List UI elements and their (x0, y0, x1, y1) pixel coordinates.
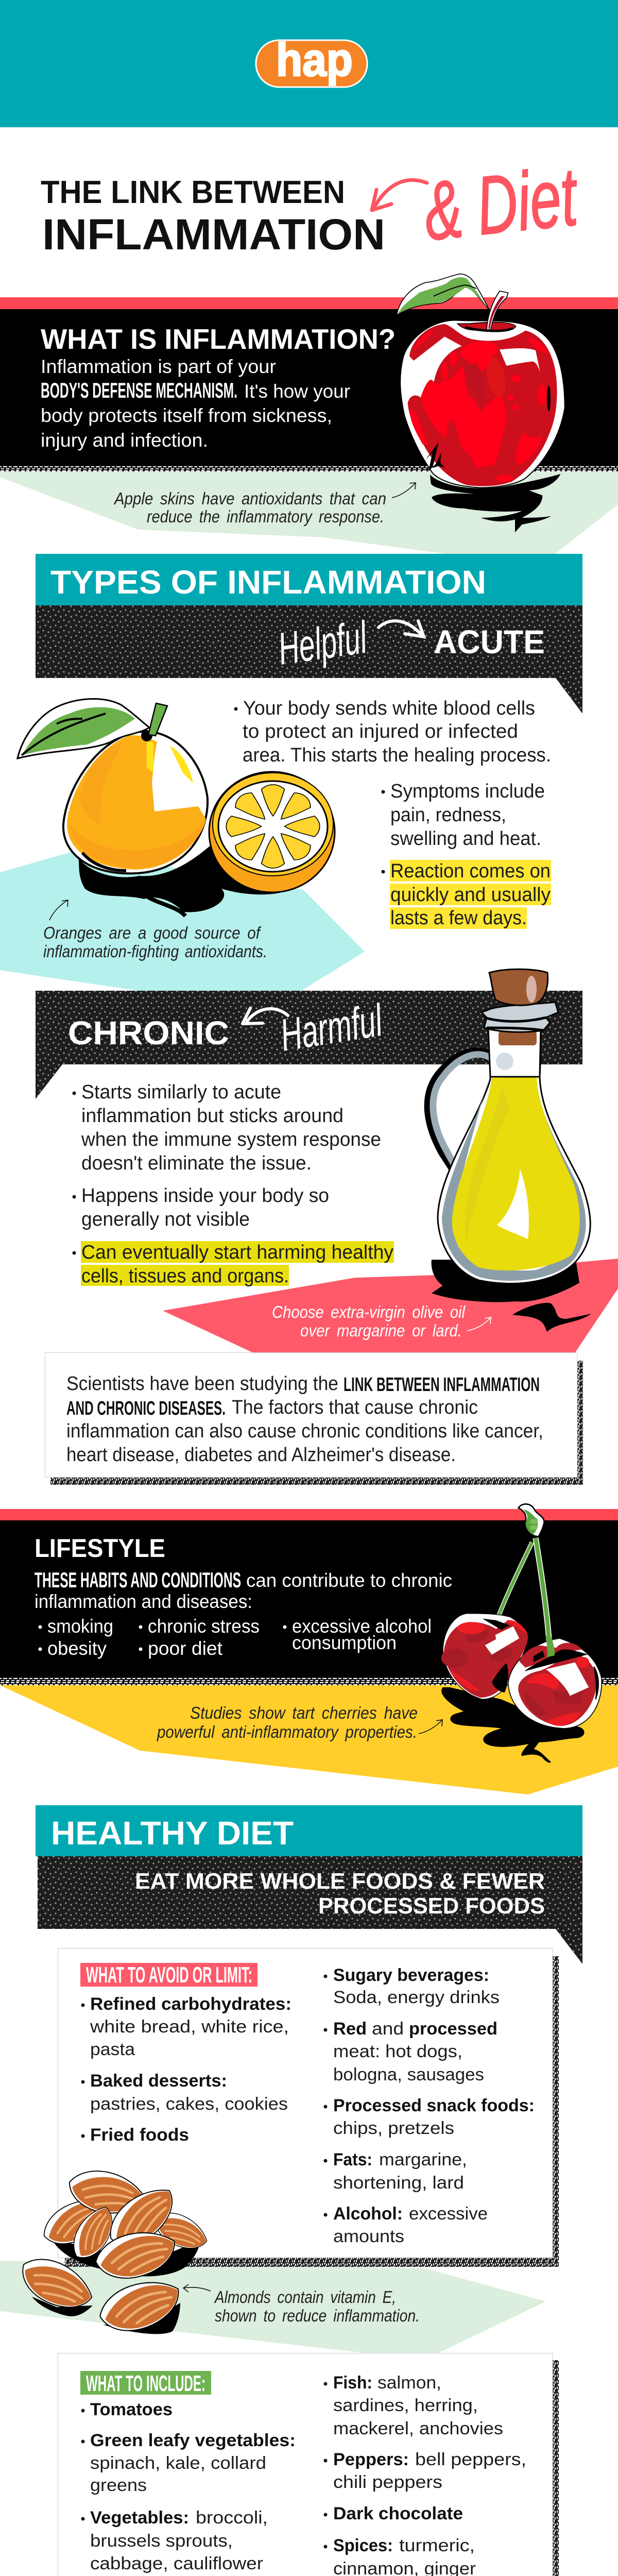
highlighted bullet: Can eventually start harming healthy (81, 1242, 393, 1263)
panel: what to include (58, 2353, 559, 2576)
habit list: smoking (47, 1616, 113, 1637)
callout: apple skins: Apple skins have antioxidants that can (113, 489, 386, 508)
include list: right column: sardines, herring, (333, 2396, 478, 2415)
panel: scientists note: Scientists have been studying the (66, 1373, 338, 1395)
caption background: green (0, 2261, 546, 2353)
intro text: inflammation and diseases: (35, 1591, 252, 1612)
avoid list: right column: Alcohol: (333, 2204, 403, 2224)
icon: cherries (441, 1504, 602, 1762)
arrow (419, 1720, 442, 1734)
callout: apple skins: reduce the inflammatory response. (147, 507, 384, 526)
heading: LIFESTYLE (35, 1534, 165, 1563)
avoid list: right column: chips, pretzels (333, 2119, 454, 2138)
callout: oranges: inflammation-fighting antioxidants. (43, 942, 267, 961)
acute bullets: Your body sends white blood cells (243, 698, 535, 719)
callout: olive oil: Choose extra-virgin olive oil (272, 1302, 466, 1321)
highlighted bullet (72, 1241, 394, 1287)
chronic bullets: when the immune system response (81, 1129, 381, 1150)
avoid list: left column (81, 1994, 291, 2145)
avoid list: right column: bologna, sausages (333, 2065, 484, 2084)
callout: cherries (157, 1703, 442, 1741)
callout: olive oil (272, 1302, 491, 1340)
banner: chronic: Harmful (277, 994, 386, 1061)
chronic bullets: doesn't eliminate the issue. (81, 1153, 312, 1174)
habit list: consumption (292, 1632, 397, 1653)
include list: right column: Spices: (333, 2536, 393, 2555)
include list: left column: spinach, kale, collard (90, 2453, 266, 2473)
avoid list: right column (323, 1965, 535, 2246)
arrow: diet to inflammation (372, 180, 427, 210)
avoid list: right column: processed (409, 2019, 497, 2039)
acute bullets: area. This starts the healing process. (243, 744, 551, 766)
avoid list: right column: Sugary beverages: (333, 1965, 489, 1985)
include list: right column: mackerel, anchovies (333, 2419, 503, 2438)
chronic bullets: inflammation but sticks around (81, 1105, 344, 1127)
avoid list: left column: pasta (90, 2040, 135, 2059)
arrow (392, 483, 416, 498)
acute bullets: pain, redness, (390, 804, 506, 826)
avoid list: right column: meat: hot dogs, (333, 2042, 462, 2061)
chronic bullets: Happens inside your body so (81, 1185, 329, 1207)
panel: scientists note: inflammation can also cause chronic conditions like cancer, (66, 1420, 543, 1442)
title: INFLAMMATION (42, 210, 385, 259)
include list: left column: cabbage, cauliflower (90, 2554, 263, 2573)
include list: left column: broccoli, (196, 2508, 268, 2528)
avoid list: left column: pastries, cakes, cookies (90, 2094, 288, 2114)
definition text: body protects itself from sickness, (41, 405, 332, 426)
caption background: aqua (0, 851, 365, 991)
acute bullets: swelling and heat. (390, 828, 541, 850)
avoid list: right column: Processed snack foods: (333, 2096, 535, 2115)
callout: almonds (183, 2284, 420, 2325)
avoid list: right column: Red (333, 2019, 367, 2039)
panel: types of inflammation (0, 554, 618, 1485)
label: avoid: WHAT TO AVOID OR LIMIT: (86, 1962, 252, 1988)
section heading (36, 1805, 582, 1856)
acute bullets (234, 698, 551, 929)
include list: right column: Fish: (333, 2373, 372, 2393)
icon: apple (397, 274, 565, 532)
include list: left column: greens (90, 2476, 147, 2495)
label: include: WHAT TO INCLUDE: (86, 2371, 205, 2396)
habit list: obesity (47, 1638, 107, 1659)
arrow (243, 1008, 288, 1024)
include list: right column: Peppers: (333, 2450, 409, 2469)
include list: left column: Tomatoes (90, 2400, 173, 2419)
banner: chronic (36, 991, 582, 1099)
banner: eat more whole foods: EAT MORE WHOLE FOODS & FEWER (135, 1869, 545, 1894)
arrow (467, 1317, 491, 1331)
title: THE LINK BETWEEN (41, 175, 345, 210)
chronic bullets: generally not visible (81, 1209, 250, 1230)
callout: cherries: powerful anti-inflammatory properties. (157, 1722, 417, 1741)
caption background: coral (163, 1259, 618, 1352)
section heading (36, 554, 582, 605)
avoid list: right column: Soda, energy drinks (333, 1988, 500, 2007)
avoid list: right column: Fats: (333, 2150, 372, 2170)
highlighted bullet: cells, tissues and organs. (81, 1265, 289, 1287)
banner: eat more whole foods: PROCESSED FOODS (318, 1893, 545, 1919)
habit list: excessive alcohol (292, 1616, 432, 1637)
include list: right column: bell peppers, (415, 2450, 526, 2469)
callout: almonds: Almonds contain vitamin E, (214, 2287, 396, 2307)
section heading: HEALTHY DIET (51, 1815, 294, 1852)
banner: acute: Helpful (275, 612, 370, 674)
panel: scientists note: heart disease, diabetes and Alzheimer's disease. (66, 1444, 456, 1466)
banner: acute (36, 605, 582, 714)
avoid list: left column: white bread, white rice, (90, 2017, 289, 2037)
highlighted bullet: quickly and usually (390, 884, 551, 906)
panel: scientists note (45, 1353, 583, 1485)
callout: olive oil: over margarine or lard. (300, 1321, 462, 1340)
panel: scientists note: AND CHRONIC DISEASES. (66, 1398, 226, 1419)
intro text (35, 1568, 452, 1612)
include list: left column (81, 2400, 300, 2576)
banner: acute: ACUTE (434, 623, 545, 660)
icon: almonds (13, 2163, 212, 2338)
chronic bullets: Starts similarly to acute (81, 1081, 281, 1103)
avoid list: right column: excessive (409, 2204, 488, 2224)
panel: scientists note: The factors that cause chronic (232, 1397, 478, 1418)
callout: oranges (43, 900, 267, 961)
banner: chronic: CHRONIC (68, 1014, 229, 1052)
chronic bullets (72, 1081, 394, 1287)
highlighted bullet (381, 860, 551, 929)
logo: hap: hap (276, 35, 353, 86)
arrow (183, 2284, 211, 2292)
habit list (38, 1616, 432, 1659)
definition text: injury and infection. (41, 430, 208, 451)
acute bullets: Symptoms include (390, 781, 545, 802)
include list: left column: Green leafy vegetables: (90, 2431, 296, 2450)
avoid list: right column: margarine, (379, 2150, 467, 2170)
include list: right column: chili peppers (333, 2472, 442, 2492)
arrow (49, 900, 68, 920)
panel: what is inflammation (0, 274, 618, 554)
definition text: BODY'S DEFENSE MECHANISM. (41, 378, 237, 402)
section heading: TYPES OF INFLAMMATION (50, 564, 486, 601)
icon: olive oil bottle (430, 969, 591, 1332)
callout: cherries: Studies show tart cherries have (190, 1703, 418, 1722)
avoid list: right column: shortening, lard (333, 2173, 464, 2193)
icon: oranges (18, 699, 335, 916)
avoid list: left column: Refined carbohydrates: (90, 1994, 291, 2014)
avoid list: left column: Fried foods (90, 2125, 189, 2145)
include list: left column: Vegetables: (90, 2508, 189, 2528)
highlighted bullet: lasts a few days. (390, 907, 527, 929)
panel: healthy diet (0, 1805, 618, 2576)
include list: right column: salmon, (377, 2373, 441, 2393)
banner: eat more whole foods (38, 1856, 582, 1964)
include list: left column: brussels sprouts, (90, 2531, 233, 2551)
caption background: green (0, 471, 618, 554)
label: avoid (80, 1962, 258, 1988)
habit list: chronic stress (148, 1616, 260, 1637)
habit list: poor diet (148, 1638, 223, 1659)
acute bullets: to protect an injured or infected (243, 721, 518, 742)
title (41, 149, 583, 259)
include list: right column: Dark chocolate (333, 2504, 463, 2523)
arrow (379, 621, 424, 637)
panel: lifestyle (0, 1504, 618, 1794)
intro text: THESE HABITS AND CONDITIONS (35, 1568, 241, 1592)
include list: right column (323, 2373, 526, 2576)
definition text (41, 356, 350, 451)
avoid list: right column: amounts (333, 2227, 404, 2246)
callout: apple skins (113, 483, 416, 526)
caption background: yellow (0, 1685, 618, 1794)
label: include (80, 2371, 211, 2396)
definition text: It's how your (244, 381, 350, 402)
include list: right column: turmeric, (399, 2536, 475, 2555)
callout: almonds: shown to reduce inflammation. (215, 2306, 420, 2325)
avoid list: left column: Baked desserts: (90, 2071, 227, 2091)
highlighted bullet: Reaction comes on (390, 860, 551, 882)
panel: avoid or limit (58, 1948, 559, 2267)
definition text: Inflammation is part of your (41, 356, 276, 377)
intro text: can contribute to chronic (246, 1570, 452, 1591)
heading: WHAT IS INFLAMMATION? (41, 323, 396, 355)
callout: oranges: Oranges are a good source of (43, 923, 262, 942)
header band (0, 0, 618, 127)
avoid list: right column: and (372, 2019, 404, 2039)
